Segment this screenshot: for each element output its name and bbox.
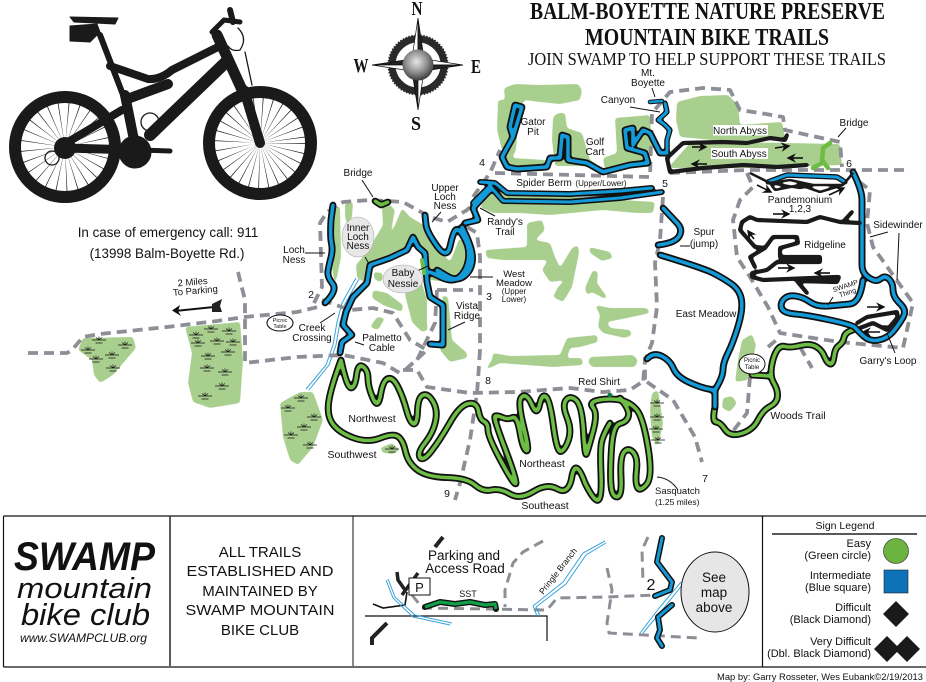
- label: top trails: Canyon: [601, 95, 635, 106]
- swamp tufts: [81, 326, 665, 452]
- icon: rear wheel: [15, 97, 115, 197]
- label: top trails: Spider Berm: [516, 178, 572, 189]
- label: east trails: SWAMP: [832, 279, 859, 294]
- label: West side trails: Nessie: [388, 279, 419, 290]
- trails: blue routes: [325, 101, 905, 407]
- label: West side trails: Creek: [299, 323, 326, 334]
- logo: swamp mountain bike club: mountain: [17, 573, 152, 605]
- label: top trails: [516, 68, 869, 189]
- label: south trails: [327, 377, 700, 512]
- label: West side trails: Loch: [347, 232, 369, 243]
- label: east trails: (jump): [690, 239, 718, 250]
- picnic table left: [267, 315, 293, 331]
- picnic table left: Picnic: [273, 318, 288, 324]
- label: West side trails: Lower): [502, 295, 527, 304]
- label: West side trails: Inner: [347, 223, 370, 234]
- label: junction numbers: 7: [702, 473, 708, 485]
- label: south trails: Southeast: [521, 500, 569, 512]
- label: top trails: South Abyss: [711, 149, 767, 160]
- label: junction numbers: 9: [444, 488, 450, 500]
- statement text: MAINTAINED BY: [202, 583, 318, 600]
- legend: easy: Easy: [847, 538, 871, 550]
- label: West side trails: Ness: [347, 241, 369, 252]
- label: east trails: [676, 195, 923, 422]
- label: West side trails: West: [503, 269, 525, 280]
- parking and access road mini map: Parking and: [428, 548, 500, 563]
- sign legend: Sign Legend: [816, 520, 875, 532]
- statement text: SWAMP MOUNTAIN: [186, 602, 334, 619]
- label: West side trails: Randy's: [487, 217, 523, 228]
- label: top trails: Pit: [527, 127, 539, 138]
- label: West side trails: Cable: [369, 343, 395, 354]
- trail: SST: [425, 602, 496, 609]
- title: JOIN SWAMP TO HELP SUPPORT THESE TRAILS: [528, 49, 886, 69]
- label: top trails: Golf: [586, 137, 604, 148]
- label: top trails: Bridge: [840, 118, 869, 129]
- label: West side trails: [283, 168, 532, 354]
- statement text: ALL TRAILS: [219, 544, 301, 561]
- statement text: ESTABLISHED AND: [186, 563, 334, 580]
- label: West side trails: Ridge: [454, 311, 480, 322]
- label: West side trails: Palmetto: [362, 333, 402, 344]
- logo: swamp mountain bike club: www.SWAMPCLUB.org: [20, 631, 147, 645]
- label: south trails: Southwest: [327, 449, 377, 461]
- parking and access road mini map: Pringle Branch: [537, 546, 579, 596]
- arrow: to parking: [172, 275, 222, 316]
- parking and access road mini map: [365, 537, 749, 646]
- dashed access roads: [28, 88, 913, 500]
- icon: parking sign: P: [415, 580, 424, 595]
- label: West side trails: Vista: [456, 301, 478, 312]
- label: junction numbers: 8: [485, 375, 491, 387]
- legend: easy: [804, 538, 908, 564]
- label: junction numbers: 2: [308, 289, 314, 301]
- trail name labels: [172, 68, 923, 512]
- picnic table left: Table: [273, 324, 287, 330]
- legend: very difficult: Very Difficult: [810, 636, 871, 648]
- callout: see map above: See: [702, 570, 726, 585]
- legend: difficult: [790, 601, 909, 627]
- legend: very difficult: (Dbl. Black Diamond): [767, 648, 871, 660]
- title: [528, 0, 886, 69]
- legend: very difficult: [767, 636, 920, 662]
- label: east trails: East Meadow: [676, 309, 737, 320]
- label: top trails: North Abyss: [713, 126, 767, 137]
- emergency text: In case of emergency call: 911: [78, 225, 258, 240]
- legend: easy: (Green circle): [804, 550, 871, 562]
- label: West side trails: (Upper: [502, 287, 527, 296]
- label: junction numbers: 4: [479, 157, 485, 169]
- label: West side trails: Meadow: [496, 278, 532, 289]
- label: West side trails: Loch: [283, 245, 305, 256]
- label: east trails: Ridgeline: [804, 240, 846, 251]
- label: south trails: (1.25 miles): [655, 497, 700, 507]
- parking and access road mini map: SST: [459, 589, 477, 599]
- label: West side trails: Crossing: [292, 333, 332, 344]
- compass letters: E: [471, 56, 481, 78]
- label: West side trails: Bridge: [344, 168, 373, 179]
- label: east trails: Garry's Loop: [860, 356, 917, 367]
- label: east trails: Table: [745, 365, 760, 371]
- label: south trails: Northeast: [519, 458, 565, 470]
- legend: difficult: (Black Diamond): [790, 614, 871, 626]
- legend: difficult: Difficult: [835, 602, 871, 614]
- label: east trails: 1,2,3: [789, 204, 812, 215]
- arrow: to parking: 2 Miles: [177, 276, 208, 289]
- compass rose: [354, 0, 481, 135]
- legend: intermediate: [805, 570, 908, 594]
- label: junction numbers: 5: [662, 178, 668, 190]
- label: east trails: Pandemonium: [768, 195, 832, 206]
- emergency text: [78, 225, 258, 261]
- callout: see map above: above: [696, 600, 732, 615]
- label: east trails: Woods Trail: [770, 410, 826, 422]
- logo: swamp mountain bike club: [14, 535, 155, 645]
- icon: bike frame: [45, 10, 260, 168]
- map credit: Map by: Garry Rosseter, Wes Eubank©2/19/2013: [717, 672, 923, 682]
- label: east trails: Picnic: [744, 358, 760, 364]
- label: east trails: Sidewinder: [873, 220, 923, 231]
- label: West side trails: Loch: [434, 192, 456, 203]
- callout: see map above: [681, 552, 749, 632]
- label: south trails: Northwest: [348, 413, 396, 425]
- trails: black diamond routes: [610, 135, 898, 397]
- sign legend: [767, 520, 920, 662]
- bicycle silhouette: [15, 10, 311, 197]
- label: West side trails: Ness: [283, 255, 305, 266]
- label: West side trails: Upper: [431, 183, 459, 194]
- label: top trails: (Upper/Lower): [575, 179, 627, 188]
- legend: intermediate: Intermediate: [810, 570, 871, 582]
- compass letters: [354, 0, 481, 135]
- callout: see map above: map: [701, 585, 727, 600]
- bottom panel frame: [4, 516, 926, 667]
- label: south trails: Sasquatch: [655, 486, 700, 497]
- icon: compass star points: [372, 18, 463, 110]
- statement text: BIKE CLUB: [221, 622, 299, 639]
- label: top trails: Gator: [520, 117, 546, 128]
- label: east trails: Spur: [693, 227, 715, 238]
- label: top trails: Cart: [586, 147, 605, 158]
- logo: swamp mountain bike club: bike club: [21, 597, 150, 632]
- icon: parking sign: [409, 578, 430, 595]
- trails: green routes: [328, 143, 853, 500]
- label: West side trails: Trail: [495, 227, 515, 238]
- label: top trails: Mt.: [641, 68, 655, 79]
- emergency text: (13998 Balm-Boyette Rd.): [90, 246, 244, 261]
- label: junction numbers: 3: [486, 291, 492, 303]
- icon: compass ball: [402, 50, 434, 80]
- swamp and vegetation areas: [78, 84, 842, 465]
- label: West side trails: Ness: [434, 201, 456, 212]
- label: top trails: Boyette: [631, 78, 665, 89]
- label: south trails: Red Shirt: [578, 377, 620, 388]
- statement text: [186, 544, 334, 639]
- compass letters: W: [354, 55, 368, 77]
- compass letters: S: [411, 113, 421, 135]
- icon: compass ring: [388, 36, 448, 94]
- trail: mini blue: [655, 538, 672, 646]
- logo: swamp mountain bike club: SWAMP: [14, 535, 155, 579]
- legend: intermediate: (Blue square): [805, 582, 871, 594]
- title: MOUNTAIN BIKE TRAILS: [585, 25, 829, 51]
- arrow: to parking: To Parking: [173, 284, 218, 299]
- label: east trails: Thing: [838, 287, 857, 299]
- label: West side trails: Baby: [392, 268, 414, 279]
- direction arrows: [692, 146, 884, 332]
- parking and access road mini map: 2: [647, 577, 656, 594]
- creeks: [306, 278, 359, 390]
- label: junction numbers: [308, 157, 852, 500]
- parking and access road mini map: Access Road: [425, 561, 505, 576]
- icon: front wheel: [209, 92, 311, 194]
- label: junction numbers: 6: [846, 158, 852, 170]
